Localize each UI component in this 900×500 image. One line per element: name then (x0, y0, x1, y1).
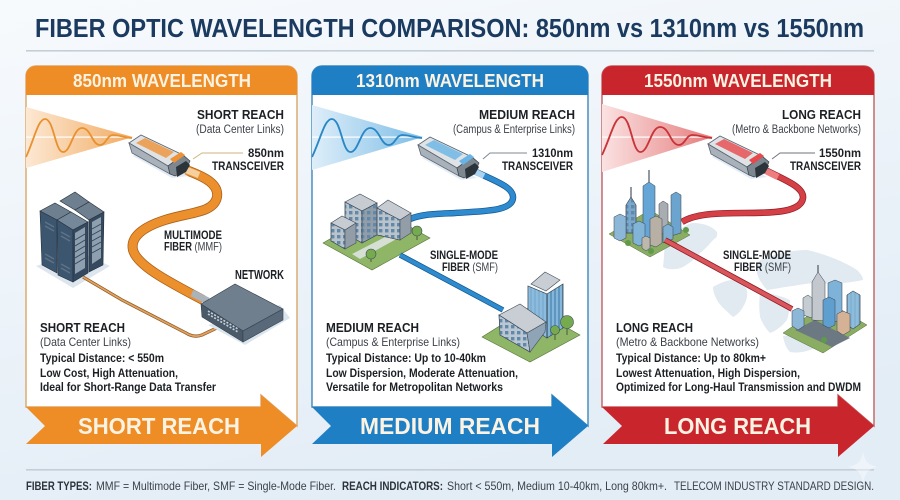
fiber cable: multimode (133, 169, 217, 301)
text block: short reach details (40, 321, 216, 394)
icon: enterprise building and tower (482, 272, 580, 362)
panel header: 1550nm (602, 66, 874, 95)
transceiver callout: 1550nm (772, 146, 861, 173)
reach label: short: (Data Center Links) (196, 124, 284, 136)
reach label: short (196, 108, 284, 136)
footer note: FIBER TYPES: (26, 479, 92, 493)
footer note: REACH INDICATORS: (342, 479, 443, 493)
fiber label: single-mode 1310 (430, 248, 498, 274)
panel header: 850nm (26, 66, 297, 95)
text block: medium reach details: Low Dispersion, Moderate Attenuation, (326, 366, 518, 380)
icon: destination city skyline (783, 265, 867, 353)
arrow banner: short reach: SHORT REACH (78, 413, 240, 439)
reach label: medium: MEDIUM REACH (479, 108, 575, 122)
transceiver callout: 850nm: TRANSCEIVER (212, 159, 284, 173)
text block: medium reach details: Versatile for Metropolitan Networks (326, 380, 503, 394)
fiber label: single-mode 1310: SINGLE-MODE (430, 248, 498, 262)
text block: short reach details: (Data Center Links) (40, 335, 131, 349)
text block: long reach details: Typical Distance: Up to 80km+ (616, 351, 766, 365)
text block: long reach details (616, 321, 861, 394)
fiber label: multimode: MULTIMODE (164, 228, 222, 242)
text block: medium reach details: MEDIUM REACH (326, 321, 419, 335)
icon: transceiver 1550nm (708, 136, 769, 179)
transceiver callout: 1310nm (483, 146, 573, 173)
panel header: 1310nm: 1310nm WAVELENGTH (356, 71, 544, 91)
footer note: MMF = Multimode Fiber, SMF = Single-Mode Fiber. (96, 479, 336, 493)
text block: short reach details: SHORT REACH (40, 321, 125, 335)
panel header: 1310nm (312, 66, 588, 95)
fiber label: single-mode 1550: FIBER (SMF) (734, 260, 791, 274)
world map backdrop (663, 223, 863, 353)
fiber label: single-mode 1310: FIBER (SMF) (442, 260, 498, 274)
reach label: long (732, 108, 861, 136)
footer note: Short < 550m, Medium 10-40km, Long 80km+. (447, 479, 667, 493)
footer note (26, 479, 874, 493)
fiber cable: server to switch (83, 277, 223, 336)
text block: long reach details: Lowest Attenuation, High Dispersion, (616, 366, 800, 380)
text block: medium reach details: (Campus & Enterprise Links) (326, 335, 460, 349)
signal wave cone: 1310nm (312, 105, 423, 170)
transceiver callout: 1550nm: TRANSCEIVER (790, 159, 861, 173)
fiber label: multimode: FIBER (MMF) (164, 240, 222, 254)
icon: server racks (36, 192, 110, 288)
text block: long reach details: (Metro & Backbone Networks) (616, 335, 759, 349)
fiber label: single-mode 1550: SINGLE-MODE (723, 248, 791, 262)
arrow banner: medium reach: MEDIUM REACH (360, 413, 540, 439)
arrow banner: long reach: LONG REACH (664, 413, 811, 439)
panel: 1310nm wavelength (312, 66, 588, 457)
arrow banner: long reach (602, 395, 874, 457)
icon: sparkle watermark (848, 452, 878, 483)
fiber cable: single-mode link (400, 255, 503, 310)
panel: 850nm wavelength (26, 66, 297, 457)
arrow banner: short reach (26, 395, 297, 457)
panel header: 850nm: 850nm WAVELENGTH (73, 71, 251, 91)
signal wave cone: 850nm (26, 107, 133, 168)
icon: transceiver 1310nm (418, 137, 479, 180)
panel header: 1550nm: 1550nm WAVELENGTH (644, 71, 832, 91)
reach label: long: (Metro & Backbone Networks) (732, 124, 861, 136)
fiber label: single-mode 1550 (723, 248, 791, 274)
text block: medium reach details: Typical Distance: Up to 10-40km (326, 351, 486, 365)
icon: transceiver 850nm (129, 135, 190, 178)
text block: long reach details: Optimized for Long-Haul Transmission and DWDM (616, 380, 861, 394)
text block: short reach details: Typical Distance: < 550m (40, 351, 164, 365)
icon: network switch (201, 284, 290, 345)
text block: short reach details: Ideal for Short-Range Data Transfer (40, 380, 216, 394)
transceiver callout: 850nm: 850nm (248, 146, 284, 160)
reach label: medium (453, 108, 575, 136)
text block: medium reach details (326, 321, 518, 394)
fiber cable: metro link (682, 169, 803, 222)
transceiver callout: 850nm (193, 146, 284, 173)
reach label: short: SHORT REACH (197, 108, 284, 122)
fiber label: multimode (164, 228, 222, 254)
fiber cable: campus link (410, 169, 513, 219)
network label: NETWORK (235, 268, 284, 282)
signal wave cone: 1550nm (602, 104, 713, 172)
text block: short reach details: Low Cost, High Attenuation, (40, 366, 178, 380)
panel: 1550nm wavelength (602, 66, 874, 457)
icon: campus buildings (323, 194, 430, 270)
text block: long reach details: LONG REACH (616, 321, 693, 335)
fiber cable: long-haul link (665, 240, 792, 309)
transceiver callout: 1550nm: 1550nm (819, 146, 861, 160)
arrow banner: medium reach (312, 395, 588, 457)
icon: metro city skyline (609, 170, 690, 257)
reach label: medium: (Campus & Enterprise Links) (453, 124, 575, 136)
reach label: long: LONG REACH (782, 108, 861, 122)
transceiver callout: 1310nm: 1310nm (532, 146, 573, 160)
transceiver callout: 1310nm: TRANSCEIVER (502, 159, 573, 173)
